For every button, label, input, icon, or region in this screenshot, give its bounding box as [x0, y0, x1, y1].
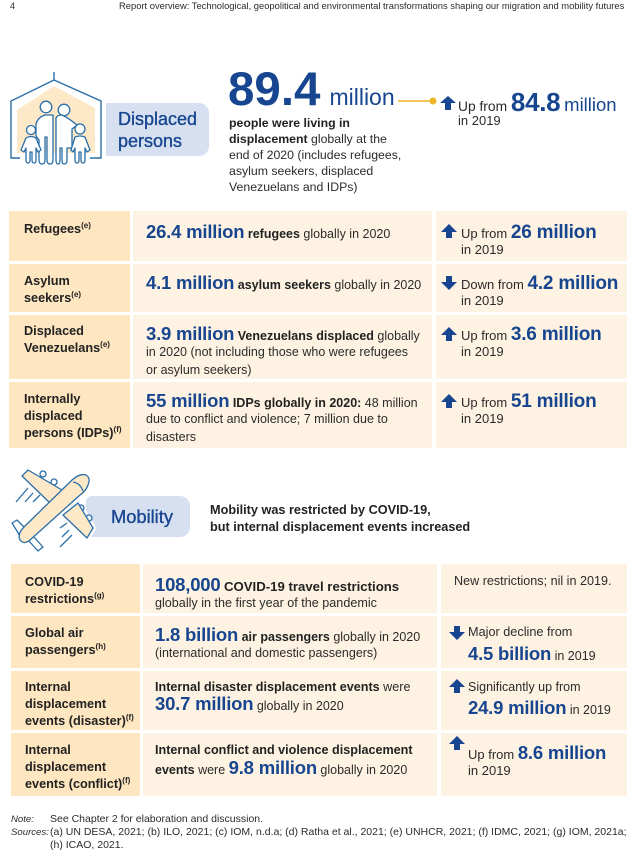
headline description — [229, 116, 401, 194]
headline description: displacement globally at the — [229, 132, 387, 146]
row: refugees — [9, 211, 627, 261]
comparison 2019 headline: Up from 84.8 million — [458, 87, 617, 117]
row: internal displacement disaster: displacement — [25, 697, 106, 711]
row: displaced Venezuelans: Displaced — [24, 324, 84, 338]
row: refugees: 26.4 million refugees globally in 2020 — [146, 221, 390, 242]
row: global air passengers: 4.5 billion in 2019 — [468, 643, 596, 664]
row: COVID-19 restrictions: New restrictions; nil in 2019. — [454, 574, 612, 588]
row: asylum seekers — [9, 264, 627, 312]
row: displaced Venezuelans: in 2019 — [461, 344, 504, 359]
row: internal displacement disaster: Internal disaster displacement events were — [155, 680, 410, 694]
row: asylum seekers: 4.1 million asylum seekers globally in 2020 — [146, 272, 421, 293]
row: displaced Venezuelans: Venezuelans(e) — [24, 340, 110, 355]
in 2019: in 2019 — [458, 113, 501, 128]
row: displaced Venezuelans: in 2020 (not including those who were refugees — [146, 345, 408, 359]
row: internally displaced persons: displaced — [24, 409, 83, 423]
running header: Report overview: Technological, geopolitical and environmental transformations shaping our migration and mobility futures — [119, 0, 624, 11]
row: refugees: Refugees(e) — [24, 221, 91, 236]
row: global air passengers — [11, 616, 627, 668]
row: refugees: Up from 26 million — [461, 222, 596, 243]
notes and sources: (a) UN DESA, 2021; (b) ILO, 2021; (c) IOM, n.d.a; (d) Ratha et al., 2021; (e) UNHCR, 2021; (f) IDMC, 2021; (g) IOM, 2021a; — [50, 826, 627, 838]
up arrow — [440, 96, 456, 110]
notes and sources: Note: — [11, 814, 34, 825]
notes and sources — [11, 813, 627, 851]
label: displaced persons — [106, 103, 209, 156]
row: asylum seekers: Down from 4.2 million — [461, 273, 618, 294]
row: internal displacement disaster: 30.7 million globally in 2020 — [155, 693, 344, 714]
mobility intro text: but internal displacement events increased — [210, 520, 470, 534]
row: internally displaced persons: 55 million IDPs globally in 2020: 48 million — [146, 390, 418, 411]
row: internal displacement conflict: Internal conflict and violence displacement — [155, 743, 413, 757]
row: internal displacement conflict: displacement — [25, 760, 106, 774]
row: internal displacement conflict: events (conflict)(f) — [25, 776, 130, 791]
headline description: end of 2020 (includes refugees, — [229, 148, 401, 162]
row: internally displaced persons: Up from 51 million — [461, 391, 596, 412]
row: global air passengers: passengers(h) — [25, 642, 106, 657]
row: internal displacement disaster: events (disaster)(f) — [25, 713, 134, 728]
row: internally displaced persons: disasters — [146, 430, 196, 444]
notes and sources: See Chapter 2 for elaboration and discussion. — [50, 813, 263, 825]
row: internally displaced persons: persons (IDPs)(f) — [24, 425, 122, 440]
row: COVID-19 restrictions: 108,000 COVID-19 travel restrictions — [155, 574, 399, 595]
icon: family in house — [10, 72, 102, 165]
row: internal displacement disaster: Significantly up from — [468, 680, 581, 694]
heading: mobility: Mobility — [111, 506, 173, 527]
table: displaced persons — [9, 211, 627, 448]
headline description: Venezuelans and IDPs) — [229, 180, 358, 194]
row: global air passengers: 1.8 billion air passengers globally in 2020 — [155, 624, 420, 645]
row: asylum seekers: Asylum — [24, 274, 70, 288]
headline description: people were living in — [229, 116, 350, 130]
row: refugees: in 2019 — [461, 242, 504, 257]
row: COVID-19 restrictions — [11, 564, 627, 613]
row: internal displacement conflict: Internal — [25, 743, 71, 757]
label: mobility — [86, 496, 190, 537]
page number: 4 — [10, 1, 15, 11]
row: displaced Venezuelans — [9, 315, 627, 379]
row: internal displacement disaster: Internal — [25, 680, 71, 694]
row: displaced Venezuelans: or asylum seekers) — [146, 362, 252, 376]
row: internal displacement disaster: 24.9 million in 2019 — [468, 697, 611, 718]
icon: airplane — [11, 469, 96, 552]
row: global air passengers: Global air — [25, 626, 84, 640]
heading: displaced persons — [118, 109, 197, 152]
headline description: asylum seekers, displaced — [229, 164, 373, 178]
row: internal displacement conflict: Up from 8.6 million — [468, 742, 606, 763]
row: internally displaced persons: in 2019 — [461, 411, 504, 426]
row: internally displaced persons: Internally — [24, 392, 80, 406]
row: internal displacement conflict: events were 9.8 million globally in 2020 — [155, 757, 407, 778]
row: displaced Venezuelans: 3.9 million Venezuelans displaced globally — [146, 323, 420, 344]
row: internally displaced persons — [9, 382, 627, 448]
row: COVID-19 restrictions: COVID-19 — [25, 575, 84, 589]
row: internal displacement conflict: in 2019 — [468, 763, 511, 778]
mobility intro text — [210, 503, 470, 534]
row: asylum seekers: in 2019 — [461, 293, 504, 308]
row: COVID-19 restrictions: restrictions(g) — [25, 591, 104, 606]
notes and sources: Sources: — [11, 827, 49, 838]
mobility intro text: Mobility was restricted by COVID-19, — [210, 503, 431, 517]
row: internally displaced persons: due to conflict and violence; 7 million due to — [146, 412, 388, 426]
row: global air passengers: Major decline from — [468, 625, 572, 639]
headline number 89.4 million: 89.4 million — [228, 63, 395, 116]
notes and sources: (h) ICAO, 2021. — [50, 839, 124, 851]
row: displaced Venezuelans: Up from 3.6 million — [461, 324, 602, 345]
row: COVID-19 restrictions: globally in the first year of the pandemic — [155, 596, 377, 610]
row: asylum seekers: seekers(e) — [24, 290, 81, 305]
heading: displaced persons: Displaced — [118, 109, 197, 129]
row: global air passengers: (international and domestic passengers) — [155, 646, 377, 660]
connector with dot — [398, 98, 436, 104]
heading: displaced persons: persons — [118, 131, 182, 151]
